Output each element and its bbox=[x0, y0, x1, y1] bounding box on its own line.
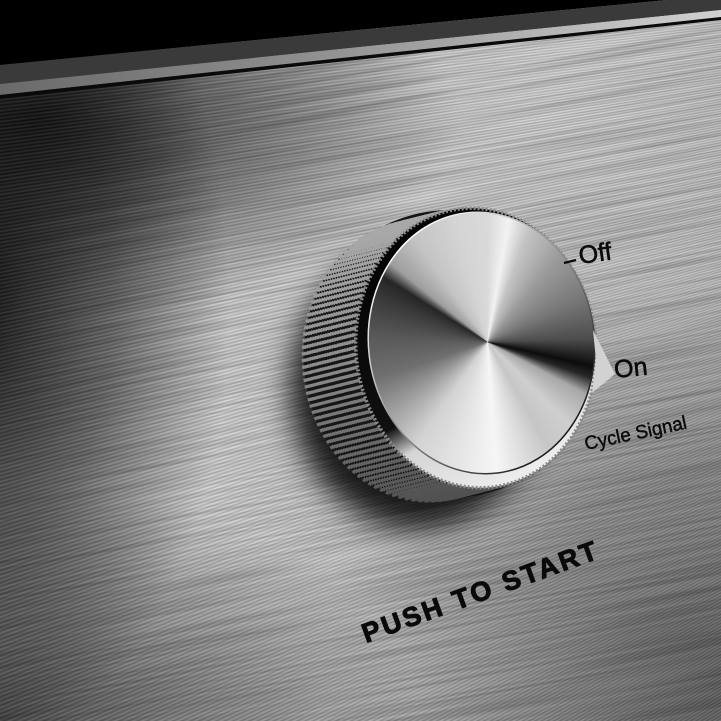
label: On: On bbox=[613, 353, 649, 384]
label: PUSH TO START: PUSH TO START bbox=[358, 535, 603, 649]
label: Off: Off bbox=[577, 238, 613, 270]
knob face: spun metal disc bbox=[353, 199, 610, 487]
label: Cycle Signal: Cycle Signal bbox=[583, 413, 689, 455]
